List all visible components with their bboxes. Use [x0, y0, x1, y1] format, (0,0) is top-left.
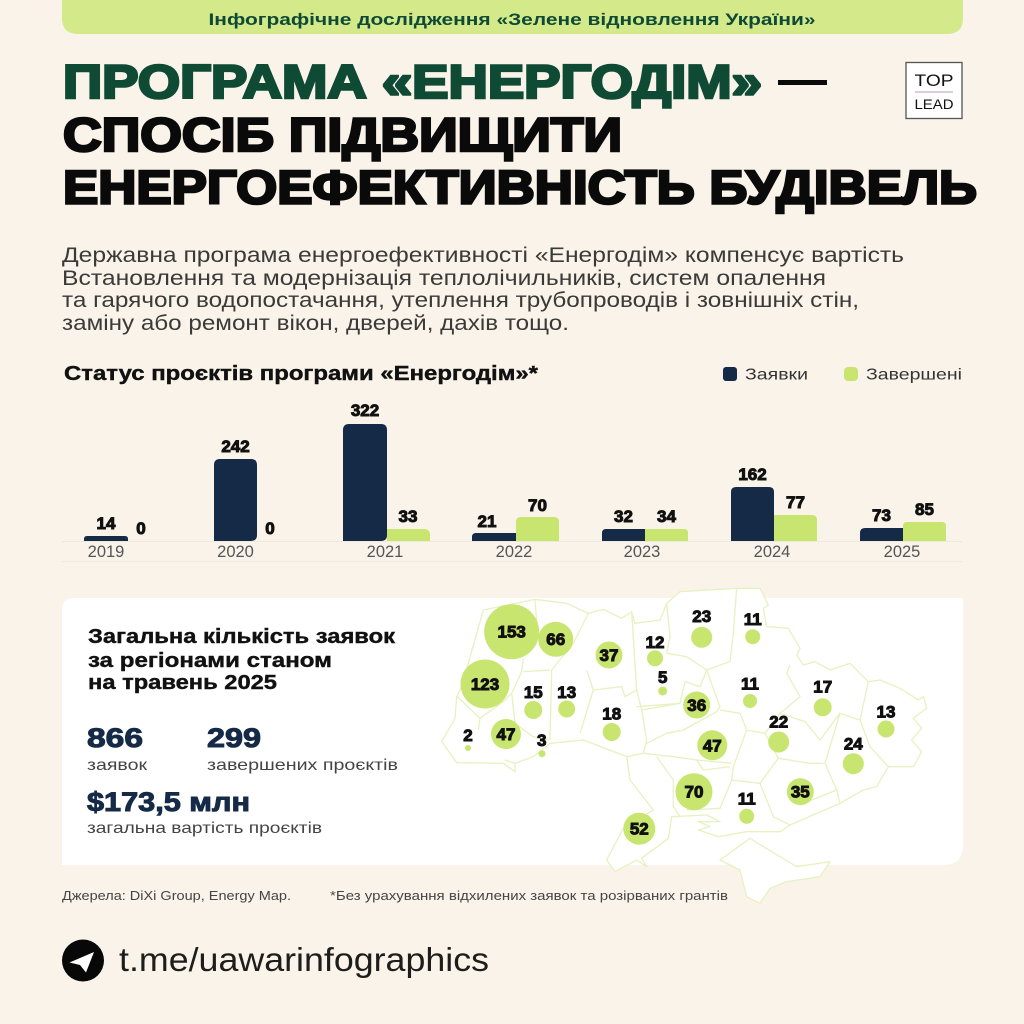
region 12	[646, 633, 664, 666]
logo: Top Lead	[906, 62, 962, 118]
region 17	[813, 678, 832, 716]
year 2020: 242	[221, 437, 250, 456]
year 2020: 0	[265, 519, 275, 538]
title	[63, 55, 977, 214]
logo: Top Lead: LEAD	[914, 96, 954, 112]
region 66: 66	[546, 630, 565, 649]
stat: applications: заявок	[87, 757, 148, 774]
stat: completed: 299	[207, 723, 261, 753]
title: ПРОГРАМА «ЕНЕРГОДІМ»	[63, 55, 762, 108]
region 11 north: 11	[744, 610, 762, 629]
stat: total cost: загальна вартість проєктів	[87, 820, 322, 837]
year 2023: 2023	[624, 543, 660, 561]
region 47 centre	[697, 730, 727, 760]
title: ЕНЕРГОЕФЕКТИВНІСТЬ БУДІВЕЛЬ	[63, 160, 977, 214]
year 2021	[343, 401, 430, 561]
stat: completed	[207, 723, 398, 774]
map of Ukraine	[442, 588, 927, 903]
stat: applications: 866	[87, 723, 143, 753]
stat: applications	[87, 723, 148, 774]
bubble values by region	[460, 604, 895, 845]
stat: total cost: $173,5 млн	[87, 787, 250, 817]
region 37: 37	[600, 646, 618, 665]
region 17: 17	[813, 678, 832, 697]
year 2025: 73	[872, 506, 891, 525]
region 123: 123	[471, 675, 499, 694]
card heading: Загальна кількість заявок	[88, 626, 396, 648]
year 2025	[860, 500, 946, 561]
year 2019: 14	[97, 514, 116, 533]
year 2022: 2022	[496, 543, 532, 561]
chart heading: Статус проєктів програми «Енергодім»*	[64, 363, 538, 385]
panel: regions card	[62, 598, 963, 865]
telegram link: t.me/uawarinfographics	[119, 941, 489, 978]
region 153: 153	[498, 622, 526, 642]
year 2021: 33	[399, 507, 417, 526]
year 2021: 2021	[367, 543, 403, 561]
region 11 centre	[741, 674, 759, 708]
region 3: 3	[537, 731, 546, 750]
year 2022	[472, 496, 559, 561]
region 22: 22	[769, 713, 788, 732]
region 70	[676, 773, 712, 810]
region 23: 23	[692, 607, 711, 626]
intro text: заміну або ремонт вікон, дверей, дахів тощо.	[62, 311, 569, 335]
region 11 south	[738, 789, 756, 824]
logo: Top Lead: TOP	[914, 71, 954, 90]
region 47	[491, 719, 521, 749]
stat: total cost	[87, 787, 322, 837]
icon: telegram	[62, 940, 104, 982]
intro text	[62, 243, 904, 335]
title: СПОСІБ ПІДВИЩИТИ	[63, 108, 622, 161]
region 35	[787, 778, 814, 805]
bar chart	[62, 401, 962, 562]
year 2024: 2024	[754, 543, 790, 561]
year 2021: 322	[351, 401, 379, 420]
card heading: на травень 2025	[88, 672, 277, 694]
year 2022: 70	[528, 496, 547, 515]
footnote: *Без урахування відхилених заявок та розірваних грантів	[330, 888, 728, 903]
stat: completed: завершених проєктів	[207, 757, 398, 774]
region 66	[538, 622, 573, 657]
card heading	[88, 626, 396, 694]
region 36: 36	[687, 696, 706, 715]
region 22	[768, 713, 789, 752]
region 11 south: 11	[738, 789, 756, 808]
region 13 east	[877, 703, 895, 738]
region 13	[557, 683, 576, 718]
year 2025: 2025	[884, 543, 920, 561]
year 2020: 2020	[217, 543, 254, 561]
region 52: 52	[630, 820, 649, 839]
region 11 centre: 11	[741, 674, 759, 693]
year 2024: 77	[786, 493, 805, 512]
region 5	[658, 668, 667, 696]
top banner	[62, 0, 963, 34]
sources: Джерела: DiXi Group, Energy Map.	[62, 888, 291, 903]
intro text: Державна програма енергоефективності «Енергодім» компенсує вартість	[62, 243, 904, 267]
year 2022: 21	[478, 512, 496, 531]
region 13 east: 13	[877, 703, 895, 722]
region 52	[623, 813, 655, 845]
region 36	[683, 692, 710, 718]
year 2025: 85	[915, 500, 934, 519]
region 47: 47	[497, 725, 515, 744]
intro text: та гарячого водопостачання, утеплення трубопроводів і зовнішніх стін,	[62, 288, 859, 312]
year 2020	[214, 437, 275, 561]
region 15: 15	[524, 683, 543, 702]
region 35: 35	[791, 783, 810, 802]
card heading: за регіонами станом	[88, 650, 332, 672]
year 2024	[731, 465, 817, 561]
year 2019	[84, 514, 146, 561]
region 153	[484, 604, 539, 659]
year 2019: 2019	[88, 543, 124, 561]
chart legend: Завершені	[866, 366, 962, 384]
region 70: 70	[685, 783, 703, 802]
chart legend	[723, 366, 962, 384]
region 18	[602, 704, 621, 741]
region 23	[691, 607, 712, 648]
region 24: 24	[844, 734, 863, 753]
region 5: 5	[658, 668, 667, 687]
region 24	[843, 734, 864, 774]
region 15	[524, 683, 543, 719]
region 47 centre: 47	[703, 736, 722, 755]
region 13: 13	[557, 683, 576, 702]
region 37	[596, 642, 622, 668]
year 2019: 0	[136, 519, 146, 538]
year 2023	[602, 507, 688, 561]
region 18: 18	[602, 704, 621, 723]
region 11 north	[744, 610, 762, 644]
region 12: 12	[646, 633, 664, 652]
top banner: Інфографічне дослідження «Зелене відновлення України»	[208, 10, 816, 29]
intro text: Встановлення та модернізація теплолічильників, систем опалення	[62, 266, 826, 290]
region 2: 2	[463, 726, 473, 745]
year 2023: 34	[657, 507, 676, 526]
year 2023: 32	[614, 507, 633, 526]
chart legend: Заявки	[745, 366, 808, 384]
region 123	[460, 660, 510, 708]
year 2024: 162	[738, 465, 767, 484]
